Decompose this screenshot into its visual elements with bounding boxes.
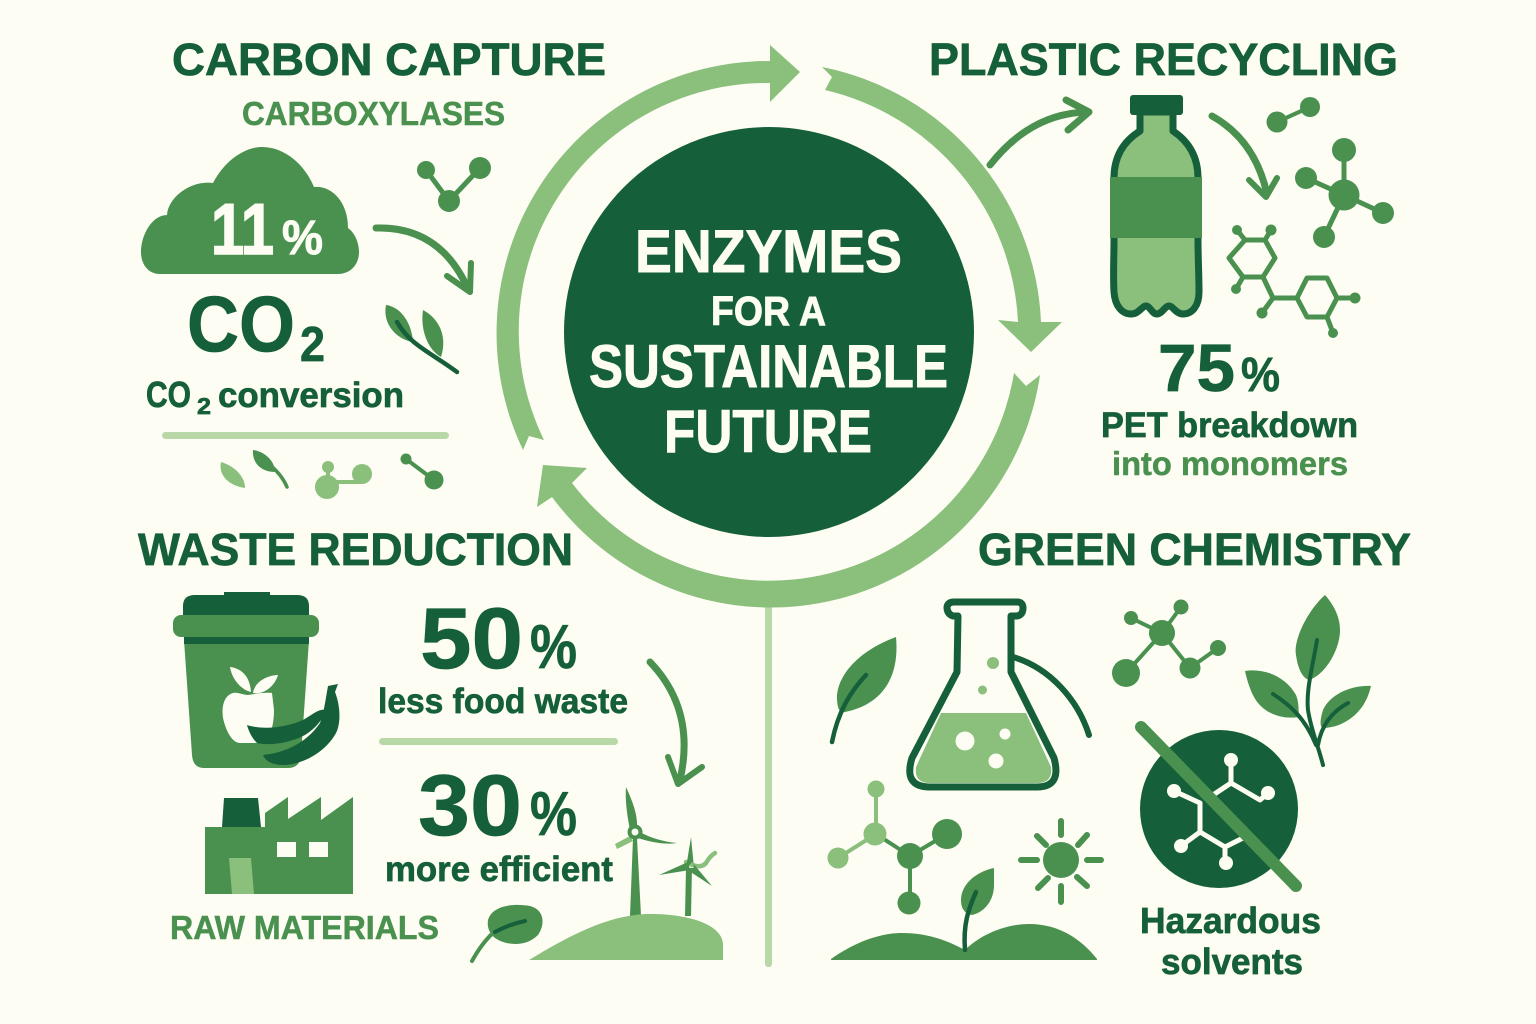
stat: 50 percent: % [530,613,577,682]
label: hazardous solvents: Hazardous [1140,900,1321,941]
label: less food waste: less food waste [378,682,628,721]
stat: 30 percent: 30 [418,758,522,854]
icon: plant [1245,595,1371,765]
stat: 75 percent: % [1241,349,1280,402]
icon: two-atom molecule [1266,97,1320,132]
icon: molecule lower left [828,780,962,914]
icon: cloud with 11 percent: 11 [211,190,274,270]
label: CO2 conversion [146,374,404,419]
icon: compost bin with food [173,592,339,768]
label: CO2: 2 [300,318,325,372]
icon: leaf left [832,637,897,742]
title text: FUTURE [664,398,872,465]
label: more efficient: more efficient [385,850,613,889]
label: CO2 conversion: CO [146,374,191,415]
stat: 75 percent: 75 [1158,331,1235,406]
central cycle [497,45,1089,608]
heading: waste reduction: WASTE REDUCTION [138,524,573,575]
subheading: carboxylases: CARBOXYLASES [242,95,505,132]
title text: SUSTAINABLE [589,333,948,400]
title text: FOR A [711,288,826,334]
icons: small leaves and molecules [221,450,444,499]
arrow: waste downward [650,662,702,784]
icon: monomer rings [1229,224,1360,338]
icon: PET bottle [1110,95,1202,314]
vertical divider line [765,600,772,967]
label: hazardous solvents [1140,900,1321,982]
stat: 30 percent [418,758,577,854]
panel: plastic recycling [929,34,1398,482]
label: CO2: CO [187,279,295,368]
title text [589,218,948,465]
icon: branched molecule [1295,138,1394,248]
heading: carbon capture: CARBON CAPTURE [172,34,606,85]
arrow: cycle arc bottom [537,373,1040,608]
icon: sun [1021,821,1101,902]
icon: leaf [472,905,543,961]
label: into monomers: into monomers [1112,445,1348,482]
stat: 75 percent [1158,331,1280,406]
icon: leaf sprig [385,305,457,372]
icon: molecule [417,157,491,212]
icon: flask with liquid [910,602,1089,787]
stat: 50 percent: 50 [420,591,523,687]
panel: green chemistry [828,524,1411,982]
icon: cloud with 11 percent: % [282,212,323,265]
arrow: cycle arc top left [497,45,800,450]
icon: cloud with 11 percent [141,147,359,274]
label: CO2 conversion: conversion [218,376,404,415]
label: raw materials: RAW MATERIALS [170,909,439,946]
arrow: cloud to leaf [376,228,471,292]
icon: crossed out hazardous molecule [1140,727,1298,888]
central title badge [564,127,974,537]
label: CO2 conversion: 2 [197,393,211,419]
icon: factory [205,797,353,894]
arrow: bottle to monomers [1212,116,1277,197]
arrow: connector to plastic recycling [990,100,1089,165]
label: PET breakdown: PET breakdown [1101,406,1358,445]
icon: sprout and soil [831,868,1097,960]
label: hazardous solvents: solvents [1161,941,1303,982]
heading: green chemistry: GREEN CHEMISTRY [978,524,1411,575]
title text: ENZYMES [635,218,902,285]
panel: waste reduction [138,524,723,961]
heading: plastic recycling: PLASTIC RECYCLING [929,34,1398,85]
arrow: cycle arc top right [822,67,1062,352]
panel: carbon capture [141,34,606,499]
icon: molecule top [1112,600,1226,687]
stat: 50 percent [420,591,577,687]
stat: 30 percent: % [530,780,577,849]
icon: wind turbines on hill [529,787,723,960]
